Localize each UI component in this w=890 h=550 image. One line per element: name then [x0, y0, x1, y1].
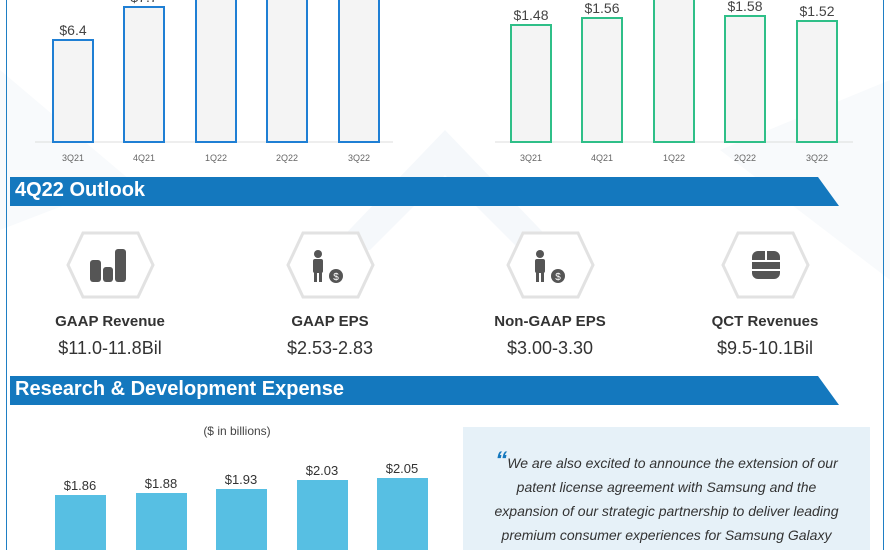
- chart: EPS bars: $1.56: [584, 0, 620, 16]
- quote box: “We are also excited to announce the extension of our: [495, 447, 838, 474]
- text: $9.5-10.1Bil: [717, 338, 813, 358]
- chart: EPS bars: 3Q21: [520, 153, 542, 163]
- icon: coins: [90, 249, 126, 282]
- chart: EPS bars: 4Q21: [591, 153, 613, 163]
- text: GAAP EPS: [291, 313, 369, 330]
- chart: EPS bars: [495, 0, 853, 163]
- chart: revenue bars: $6.4: [59, 22, 87, 38]
- text: $2.53-2.83: [287, 338, 373, 358]
- outlook items: [66, 232, 810, 298]
- text: $3.00-3.30: [507, 338, 593, 358]
- outlook labels: GAAP Revenue: [55, 313, 165, 330]
- chart: R&D: $2.03: [306, 463, 338, 478]
- chart: revenue bars: 4Q21: [133, 153, 155, 163]
- quote box: patent license agreement with Samsung and the: [517, 479, 816, 495]
- chart: EPS bars: 3Q22: [806, 153, 828, 163]
- chart: R&D: ($ in billions): [203, 424, 271, 438]
- chart: revenue bars: 2Q22: [276, 153, 298, 163]
- chart: EPS bars: 2Q22: [734, 153, 756, 163]
- chart: EPS bars: $1.48: [513, 7, 549, 23]
- icon: person with dollar: [313, 250, 343, 283]
- chart: R&D: $1.93: [225, 472, 257, 487]
- icon: person with dollar: $: [333, 272, 339, 283]
- chart: EPS bars: 1Q22: [663, 153, 685, 163]
- chart: R&D: $1.86: [64, 478, 96, 493]
- text: QCT Revenues: [712, 313, 818, 330]
- text: $11.0-11.8Bil: [58, 338, 162, 358]
- chart: R&D: $1.88: [145, 476, 177, 491]
- chart: EPS bars: $1.52: [799, 3, 835, 19]
- chart: revenue bars: [35, 0, 393, 163]
- quote box: premium consumer experiences for Samsung Galaxy: [502, 527, 831, 543]
- outlook items: $: [555, 272, 561, 283]
- quote box: [463, 427, 870, 550]
- banner: R&D: [10, 376, 839, 405]
- chart: revenue bars: 1Q22: [205, 153, 227, 163]
- banner: R&D: Research & Development Expense: [15, 378, 344, 400]
- chart: revenue bars: 3Q21: [62, 153, 84, 163]
- chart: R&D: [55, 424, 428, 550]
- text: Non-GAAP EPS: [494, 313, 606, 330]
- banner: 4Q22 Outlook: [10, 177, 839, 206]
- chart: R&D: $2.05: [386, 461, 418, 476]
- chart: revenue bars: 3Q22: [348, 153, 370, 163]
- banner: 4Q22 Outlook: 4Q22 Outlook: [15, 179, 145, 201]
- quote box: expansion of our strategic partnership to deliver leading: [494, 503, 838, 519]
- icon: chip: [752, 251, 780, 279]
